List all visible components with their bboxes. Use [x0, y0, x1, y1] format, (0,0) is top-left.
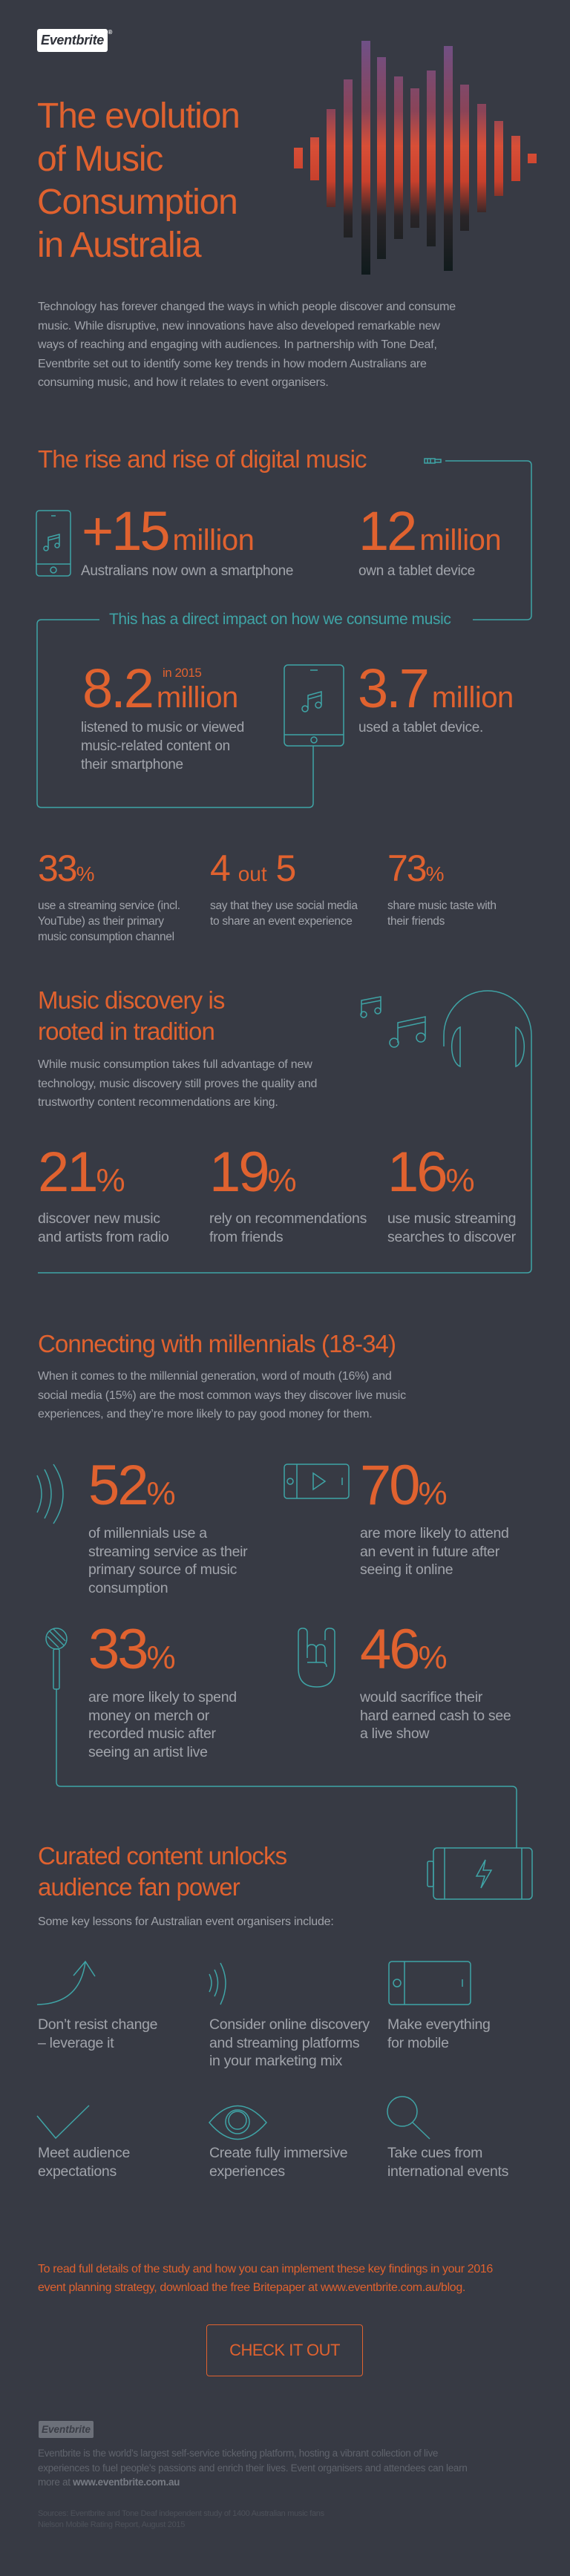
- intro paragraph: consuming music, and how it relates to event organisers.: [38, 376, 329, 389]
- title: [37, 96, 240, 265]
- stat: 33% merch: recorded music after: [88, 1725, 216, 1742]
- heading: rise of digital music: The rise and rise of digital music: [38, 445, 367, 473]
- sources: [38, 2509, 324, 2529]
- stat: 73%: 73%: [387, 848, 445, 889]
- stat: 73%: their friends: [387, 915, 445, 928]
- stat: 52%: 52%: [88, 1454, 176, 1517]
- body: music discovery: [38, 1058, 317, 1109]
- stat: 73%: share music taste with: [387, 899, 497, 912]
- stat: 8.2 million: 8.2million: [82, 658, 238, 719]
- stat: 52%: [88, 1454, 248, 1596]
- icon: sound waves: [36, 1464, 64, 1524]
- footer about text: experiences to fuel people’s passions and enrich their lives. Event organisers and attendees can learn: [38, 2462, 468, 2473]
- lesson: mobile: [387, 2016, 491, 2051]
- sources: Nielson Mobile Rating Report, August 2015: [38, 2520, 185, 2529]
- footer logo: [39, 2421, 94, 2438]
- heading: music discovery: [38, 986, 225, 1045]
- lesson: online discovery: in your marketing mix: [209, 2053, 342, 2069]
- stat: 19% friends: [209, 1141, 367, 1245]
- stat: 33% merch: money on merch or: [88, 1708, 209, 1724]
- stat: 33% streaming: music consumption channel: [38, 931, 174, 943]
- stat: 33% merch: 33%: [88, 1618, 176, 1681]
- stat: 4 out 5: [210, 848, 358, 928]
- body: millennials: [38, 1370, 406, 1420]
- stat: 33% merch: seeing an artist live: [88, 1744, 208, 1760]
- stat: 52%: primary source of music: [88, 1561, 237, 1578]
- heading: curated content: [38, 1842, 286, 1901]
- title: of Music: [37, 140, 163, 179]
- stat: 19% friends: rely on recommendations: [209, 1210, 367, 1227]
- stat: 33% streaming: YouTube) as their primary: [38, 915, 164, 928]
- intro paragraph: music. While disruptive, new innovations have also developed remarkable new: [38, 319, 440, 332]
- intro paragraph: Technology has forever changed the ways in which people discover and consume: [38, 301, 456, 313]
- icon: rock hand: [298, 1628, 335, 1688]
- stat: 52%: streaming service as their: [88, 1544, 247, 1560]
- lesson: expectations: Meet audience: [38, 2145, 130, 2161]
- lesson: don't resist change: Don’t resist change: [38, 2016, 157, 2033]
- lesson: don't resist change: – leverage it: [38, 2035, 114, 2051]
- text: smartphone music: music-related content on: [81, 738, 230, 754]
- body: millennials: experiences, and they’re more likely to pay good money for them.: [38, 1408, 373, 1420]
- stat: 4 out 5: to share an event experience: [210, 915, 353, 928]
- heading: millennials: Connecting with millennials (18-34): [38, 1330, 396, 1357]
- lesson: international: Take cues from: [387, 2145, 482, 2161]
- footer logo: Eventbrite: [42, 2424, 91, 2435]
- stat: 33% merch: [88, 1618, 237, 1760]
- intro paragraph: [38, 301, 456, 389]
- stat: 70%: seeing it online: [360, 1561, 453, 1578]
- text: smartphone music: their smartphone: [81, 757, 183, 773]
- logo: Eventbrite: Eventbrite: [41, 33, 104, 47]
- stat: 52%: consumption: [88, 1580, 168, 1596]
- lesson: online discovery: and streaming platforms: [209, 2035, 359, 2051]
- lesson: expectations: expectations: [38, 2163, 117, 2180]
- lesson: mobile: for mobile: [387, 2035, 449, 2051]
- stat: 4 out 5: 4 out 5: [210, 848, 295, 889]
- stat: 21% radio: 21%: [38, 1141, 125, 1204]
- icon: music notes and headphones with cable: [38, 990, 532, 1274]
- text: smartphone owners: Australians now own a smartphone: [81, 563, 293, 579]
- footer about text: [38, 2448, 468, 2488]
- text: ®: [108, 29, 112, 36]
- stat: 3.7 million: 3.7million: [358, 658, 514, 719]
- stat: 70%: [360, 1454, 509, 1578]
- lesson: international: international events: [387, 2163, 508, 2180]
- footer about text: more at www.eventbrite.com.au: [38, 2477, 180, 2488]
- stat: 16% streaming: 16%: [387, 1141, 475, 1204]
- text: tablet owners: own a tablet device: [358, 563, 475, 579]
- icon: battery: [427, 1847, 533, 1900]
- stat: 16% streaming: use music streaming: [387, 1210, 516, 1227]
- footer about text: Eventbrite is the world’s largest self-service ticketing platform, hosting a vibrant collection of live: [38, 2448, 438, 2459]
- intro paragraph: ways of reaching and engaging with audiences. In partnership with Tone Deaf,: [38, 338, 437, 351]
- stat: 46%: 46%: [360, 1618, 448, 1681]
- title: The evolution: [37, 96, 240, 136]
- button: check it out: CHECK IT OUT: [229, 2341, 340, 2359]
- call to action text: [38, 2263, 493, 2294]
- heading: curated content: Curated content unlocks: [38, 1842, 286, 1869]
- body: music discovery: While music consumption takes full advantage of new: [38, 1058, 312, 1071]
- lesson: mobile: Make everything: [387, 2016, 491, 2033]
- icon: microphone with cable: [45, 1628, 517, 1848]
- stat: 19% friends: 19%: [209, 1141, 297, 1204]
- stat: +15 million: +15million: [82, 500, 254, 562]
- stat: 12 million: 12million: [358, 500, 501, 562]
- icon: video phone: [284, 1464, 350, 1499]
- stat: 21% radio: and artists from radio: [38, 1229, 169, 1245]
- lesson: immersive: Create fully immersive: [209, 2145, 347, 2161]
- teal connecting text: This has a direct impact on how we consume music: [109, 611, 451, 628]
- stat: 46%: a live show: [360, 1725, 429, 1742]
- stat: 33% streaming: use a streaming service (incl.: [38, 899, 180, 912]
- text: smartphone music: [81, 720, 244, 773]
- lesson: immersive: [209, 2145, 347, 2180]
- stat: 70%: are more likely to attend: [360, 1525, 509, 1541]
- stat: 46%: hard earned cash to see: [360, 1708, 511, 1724]
- lesson: international: [387, 2145, 508, 2180]
- cable lines section 1: [36, 458, 532, 808]
- intro paragraph: Eventbrite set out to identify some key trends in how modern Australians are: [38, 358, 427, 370]
- stat: 70%: an event in future after: [360, 1544, 499, 1560]
- lesson: immersive: experiences: [209, 2163, 285, 2180]
- text: tablet usage: used a tablet device.: [358, 720, 483, 735]
- button: check it out: [206, 2324, 363, 2376]
- lesson: online discovery: [209, 2016, 370, 2069]
- lesson: expectations: [38, 2145, 130, 2180]
- body: music discovery: technology, music discovery still proves the quality and: [38, 1078, 317, 1089]
- stat: 70%: 70%: [360, 1454, 448, 1517]
- icon: smartphone with music note: [36, 510, 71, 577]
- title: Consumption: [37, 183, 238, 222]
- body: millennials: social media (15%) are the most common ways they discover live music: [38, 1389, 406, 1401]
- stat: 33% merch: are more likely to spend: [88, 1689, 237, 1705]
- stat: 46%: would sacrifice their: [360, 1689, 482, 1705]
- intro: key lessons: Some key lessons for Australian event organisers include:: [38, 1915, 334, 1928]
- stat: 33% streaming: [38, 848, 180, 943]
- stat: 19% friends: from friends: [209, 1229, 283, 1245]
- call to action text: event planning strategy, download the free Britepaper at www.eventbrite.com.au/blog.: [38, 2281, 465, 2294]
- heading: curated content: audience fan power: [38, 1873, 240, 1901]
- stat: 16% streaming: [387, 1141, 516, 1245]
- stat: 52%: of millennials use a: [88, 1525, 207, 1541]
- icon: tablet with music note: [284, 664, 344, 747]
- heading: music discovery: Music discovery is: [38, 986, 225, 1014]
- heading: music discovery: rooted in tradition: [38, 1017, 214, 1045]
- stat: 21% radio: [38, 1141, 169, 1245]
- label: in 2015: in 2015: [163, 666, 201, 680]
- sources: Sources: Eventbrite and Tone Deaf independent study of 1400 Australian music fans: [38, 2509, 324, 2518]
- lesson: online discovery: Consider online discovery: [209, 2016, 370, 2033]
- logo: Eventbrite: [37, 29, 108, 52]
- stat: 33% streaming: 33%: [38, 848, 95, 889]
- stat: 46%: [360, 1618, 511, 1742]
- body: music discovery: trustworthy content recommendations are king.: [38, 1096, 278, 1109]
- stat: 16% streaming: searches to discover: [387, 1229, 516, 1245]
- equalizer graphic: [294, 41, 537, 275]
- lesson: don't resist change: [38, 2016, 157, 2051]
- stat: 73%: [387, 848, 497, 928]
- stat: 21% radio: discover new music: [38, 1210, 160, 1227]
- title: in Australia: [37, 226, 200, 265]
- body: millennials: When it comes to the millennial generation, word of mouth (16%) and: [38, 1370, 392, 1383]
- call to action text: To read full details of the study and how you can implement these key findings in your 2016: [38, 2263, 493, 2275]
- stat: 4 out 5: say that they use social media: [210, 899, 358, 912]
- text: smartphone music: listened to music or viewed: [81, 720, 244, 735]
